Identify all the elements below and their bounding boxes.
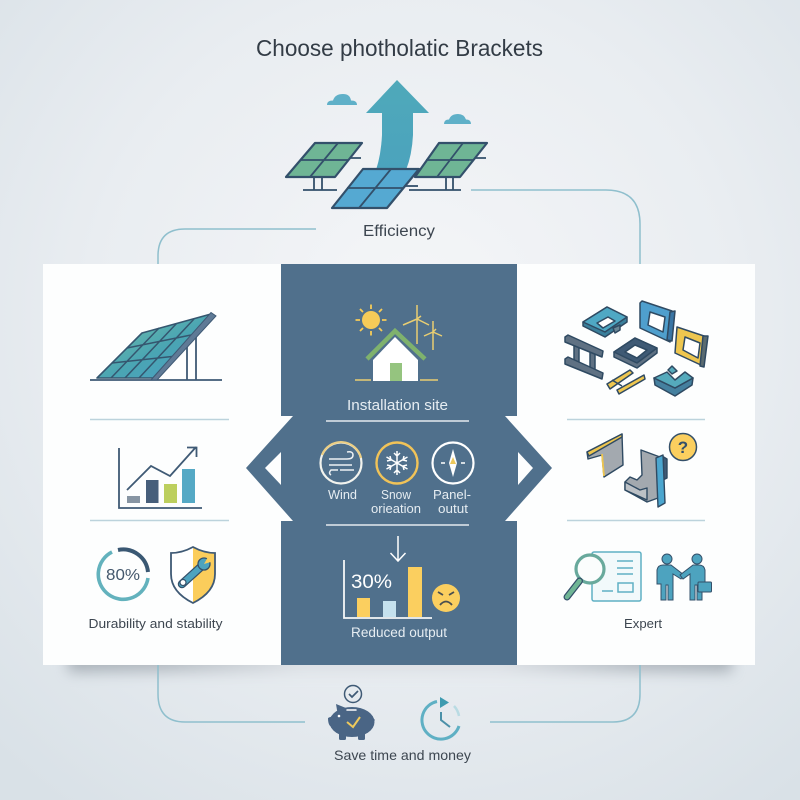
label: snow orientation: Snow xyxy=(381,487,412,502)
icon: 80% ring xyxy=(98,549,148,599)
icon: down arrow xyxy=(390,536,406,561)
divider xyxy=(326,421,469,525)
reduced output chart: 30% xyxy=(351,571,392,593)
centre panel xyxy=(246,264,552,665)
connector: bottom right xyxy=(490,665,640,722)
right white triangle xyxy=(518,452,533,485)
yellow frame xyxy=(675,327,708,367)
L bracket xyxy=(625,450,667,507)
connector: top left xyxy=(158,229,316,264)
efficiency icon xyxy=(286,80,487,208)
teal block xyxy=(654,366,693,396)
icon: clock xyxy=(422,697,459,739)
icon: sad face xyxy=(432,584,460,612)
icon: bracket assortment xyxy=(565,301,708,396)
label: outut: outut xyxy=(438,501,468,516)
label: wind: Wind xyxy=(328,487,357,502)
divider xyxy=(567,420,705,520)
label: durability and stability: Durability and stability xyxy=(88,616,223,631)
ground xyxy=(355,379,438,381)
label: orieation: orieation xyxy=(371,501,421,516)
divider xyxy=(90,420,229,520)
icon: rising arrow xyxy=(366,80,429,170)
icon: cloud right xyxy=(444,114,471,124)
icon: piggy bank xyxy=(328,704,375,740)
teal frame xyxy=(583,307,627,337)
left white triangle xyxy=(265,452,281,485)
icon: left solar panel xyxy=(286,143,362,190)
sun xyxy=(356,304,386,336)
label: panel: Panel- xyxy=(433,487,471,502)
connector: top right xyxy=(471,190,640,264)
title: Choose photholatic Brackets xyxy=(256,35,543,61)
icon: house with sun and wind turbines xyxy=(355,304,442,381)
icon: question mark badge xyxy=(670,434,696,460)
icon: document with magnifier xyxy=(567,552,641,601)
icon: centre solar panel xyxy=(332,169,419,208)
connector: bottom left xyxy=(158,665,305,722)
icon: 80% ring: 80% xyxy=(106,567,140,584)
T bracket xyxy=(587,434,623,477)
icon: wind xyxy=(320,442,362,484)
icon: handshake xyxy=(657,554,712,600)
icon: right solar panel xyxy=(409,143,487,190)
icon: cloud left xyxy=(327,94,357,105)
grey H bracket xyxy=(565,335,603,379)
dark square frame xyxy=(614,338,657,368)
label: installation site: Installation site xyxy=(347,397,448,414)
yellow bars xyxy=(607,370,645,394)
main white card xyxy=(43,264,755,665)
roof xyxy=(367,331,425,359)
icon: compass xyxy=(432,442,474,484)
icon: rising bar chart xyxy=(119,447,202,508)
icon: shield with wrench xyxy=(171,547,215,603)
icon: T bracket and L bracket xyxy=(587,434,667,507)
house body xyxy=(373,337,418,381)
icon: question mark badge: ? xyxy=(678,438,688,457)
icon: snow xyxy=(376,442,418,484)
card shadow xyxy=(68,650,732,672)
label: save time and money: Save time and money xyxy=(334,747,471,763)
label: expert: Expert xyxy=(624,616,662,631)
label: efficiency: Efficiency xyxy=(363,223,435,240)
wind turbines xyxy=(403,305,442,350)
icon: check badge xyxy=(344,686,362,702)
label: reduced output: Reduced output xyxy=(351,625,447,640)
door xyxy=(390,363,402,381)
reduced output chart xyxy=(344,560,432,618)
blue frame xyxy=(640,301,675,342)
icon: tilted solar panel xyxy=(90,312,222,380)
